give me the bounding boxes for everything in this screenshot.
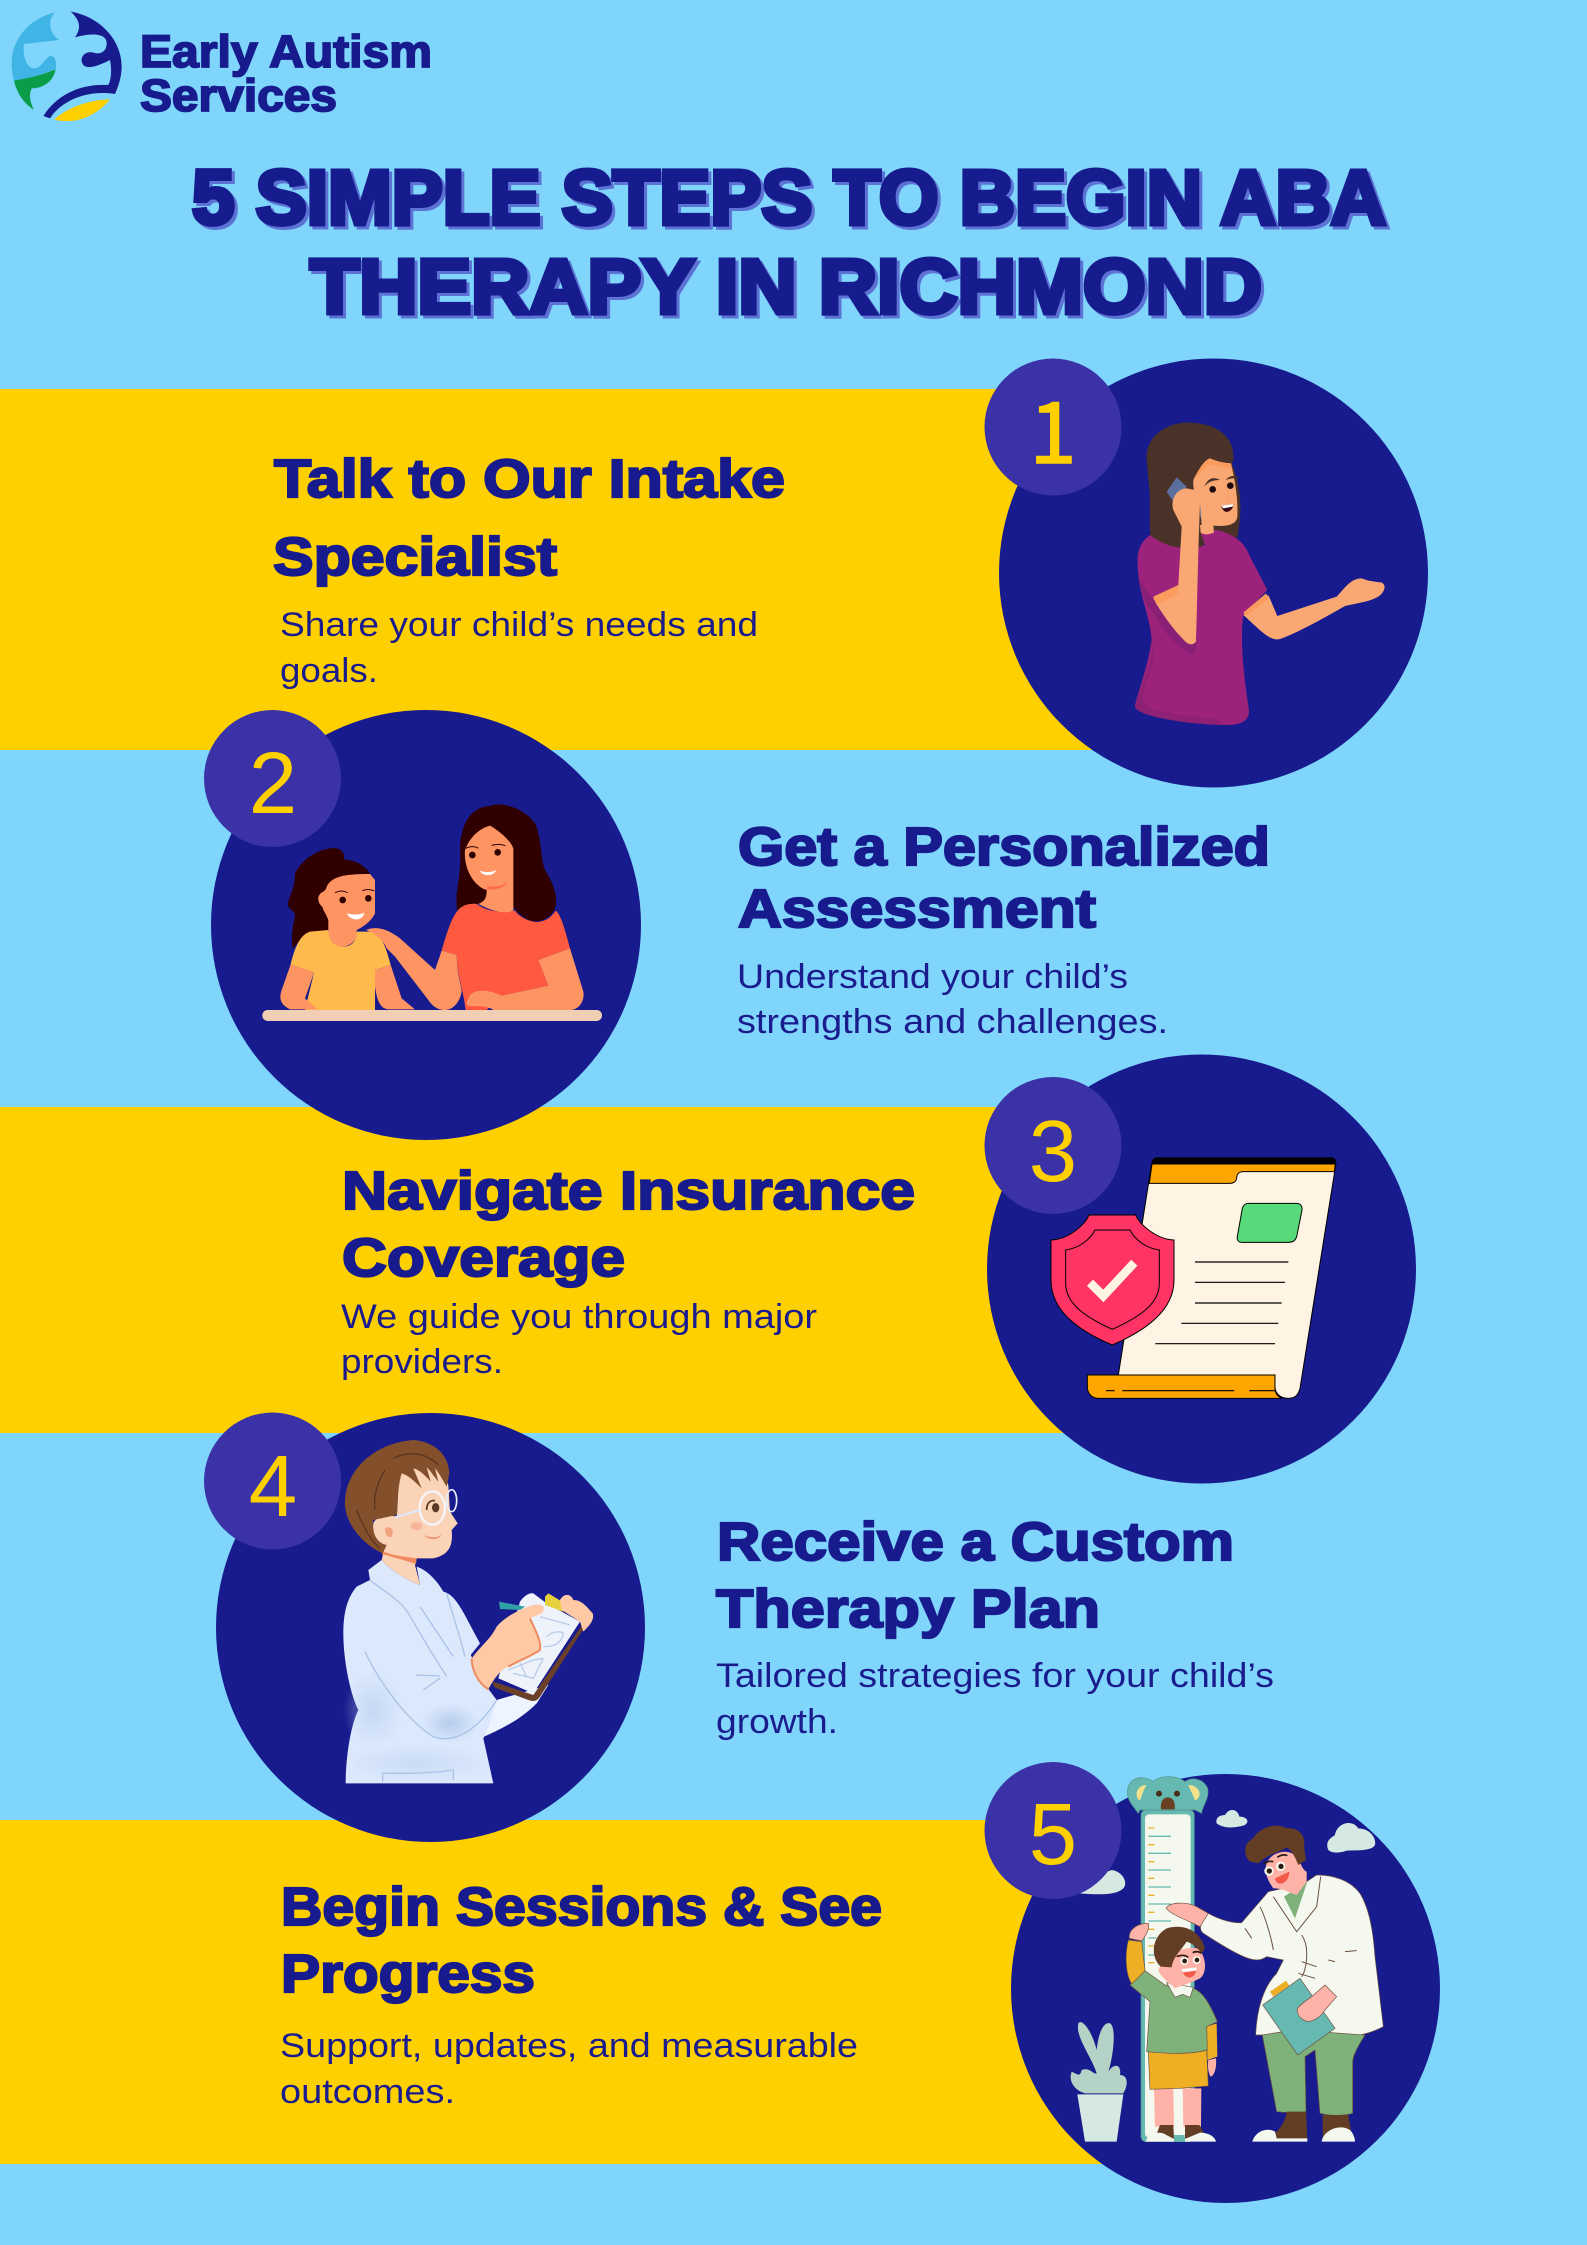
step 1 heading: Specialist bbox=[273, 527, 557, 587]
step 3 text bbox=[341, 1161, 915, 1381]
badge 1: 1 bbox=[1029, 365, 1077, 488]
icon: clinician with clipboard bbox=[343, 1440, 593, 1783]
step 5 heading: Begin Sessions & See bbox=[281, 1877, 882, 1937]
badge 5 bbox=[984, 1762, 1122, 1899]
badge 3: 3 bbox=[1029, 1103, 1077, 1200]
badge 2: 2 bbox=[249, 735, 297, 832]
step 5 heading bbox=[281, 1877, 882, 2004]
step 2 illustration circle bbox=[211, 710, 641, 1140]
step 3 heading: Navigate Insurance bbox=[342, 1161, 915, 1221]
step 5 description: Support, updates, and measurable bbox=[280, 2027, 858, 2065]
step 1 description: goals. bbox=[280, 652, 378, 690]
step 1 heading: Talk to Our Intake bbox=[274, 449, 785, 509]
title: 5 SIMPLE STEPS TO BEGIN ABA bbox=[192, 155, 1386, 241]
step 5 description bbox=[280, 2027, 858, 2111]
step 5 illustration circle bbox=[1011, 1774, 1440, 2203]
step 3 description: providers. bbox=[341, 1343, 503, 1381]
step 2 description: Understand your child’s bbox=[737, 958, 1128, 996]
step 3 description bbox=[341, 1298, 817, 1381]
step 2 description: strengths and challenges. bbox=[737, 1003, 1168, 1041]
step 2 heading: Get a Personalized bbox=[738, 817, 1270, 877]
icon: parent and child at table bbox=[262, 805, 602, 1021]
step 2 heading: Assessment bbox=[738, 879, 1096, 939]
step 4 heading: Receive a Custom bbox=[717, 1512, 1234, 1572]
step 4 description bbox=[716, 1657, 1274, 1741]
logo wordmark: Services bbox=[140, 70, 337, 121]
step 1 text bbox=[273, 449, 785, 690]
step 5 text bbox=[280, 1877, 882, 2111]
title: THERAPY IN RICHMOND bbox=[310, 244, 1262, 330]
badge 5: 5 bbox=[1029, 1786, 1077, 1883]
step 2 description bbox=[737, 958, 1168, 1041]
badge 1 bbox=[984, 358, 1122, 496]
step 4 illustration circle bbox=[216, 1413, 645, 1842]
step 3 illustration circle bbox=[987, 1054, 1416, 1484]
step 1 description: Share your child’s needs and bbox=[280, 606, 758, 644]
step 4 heading bbox=[716, 1512, 1234, 1639]
step 4 text bbox=[716, 1512, 1274, 1741]
step 1 illustration circle bbox=[999, 358, 1428, 788]
badge 3 bbox=[984, 1077, 1122, 1214]
icon: woman on phone bbox=[1135, 423, 1385, 725]
icon: doctor measuring child height bbox=[1071, 1777, 1383, 2142]
badge 4 bbox=[204, 1412, 341, 1550]
step 3 description: We guide you through major bbox=[341, 1298, 817, 1336]
step 2 text bbox=[737, 817, 1270, 1041]
logo wordmark: Early Autism bbox=[140, 26, 432, 77]
step 4 description: growth. bbox=[716, 1703, 838, 1741]
step 1 description bbox=[280, 606, 758, 690]
logo wordmark bbox=[140, 26, 432, 121]
title bbox=[192, 155, 1386, 330]
step 5 description: outcomes. bbox=[280, 2073, 455, 2111]
step 1 heading bbox=[273, 449, 785, 587]
step 3 heading bbox=[342, 1161, 915, 1288]
logo bbox=[12, 12, 432, 121]
logo mark bbox=[12, 12, 122, 121]
badge 2 bbox=[204, 710, 341, 847]
step 3 heading: Coverage bbox=[342, 1228, 625, 1288]
yellow band: step 3 bbox=[0, 1107, 1100, 1433]
step 5 heading: Progress bbox=[281, 1944, 535, 2004]
step 4 heading: Therapy Plan bbox=[716, 1579, 1100, 1639]
icon: insurance document with shield bbox=[1051, 1157, 1336, 1398]
step 4 description: Tailored strategies for your child’s bbox=[716, 1657, 1274, 1695]
yellow band: step 1 bbox=[0, 389, 1120, 750]
step 2 heading bbox=[738, 817, 1270, 939]
yellow band: step 5 bbox=[0, 1820, 1120, 2164]
badge 4: 4 bbox=[249, 1438, 297, 1535]
